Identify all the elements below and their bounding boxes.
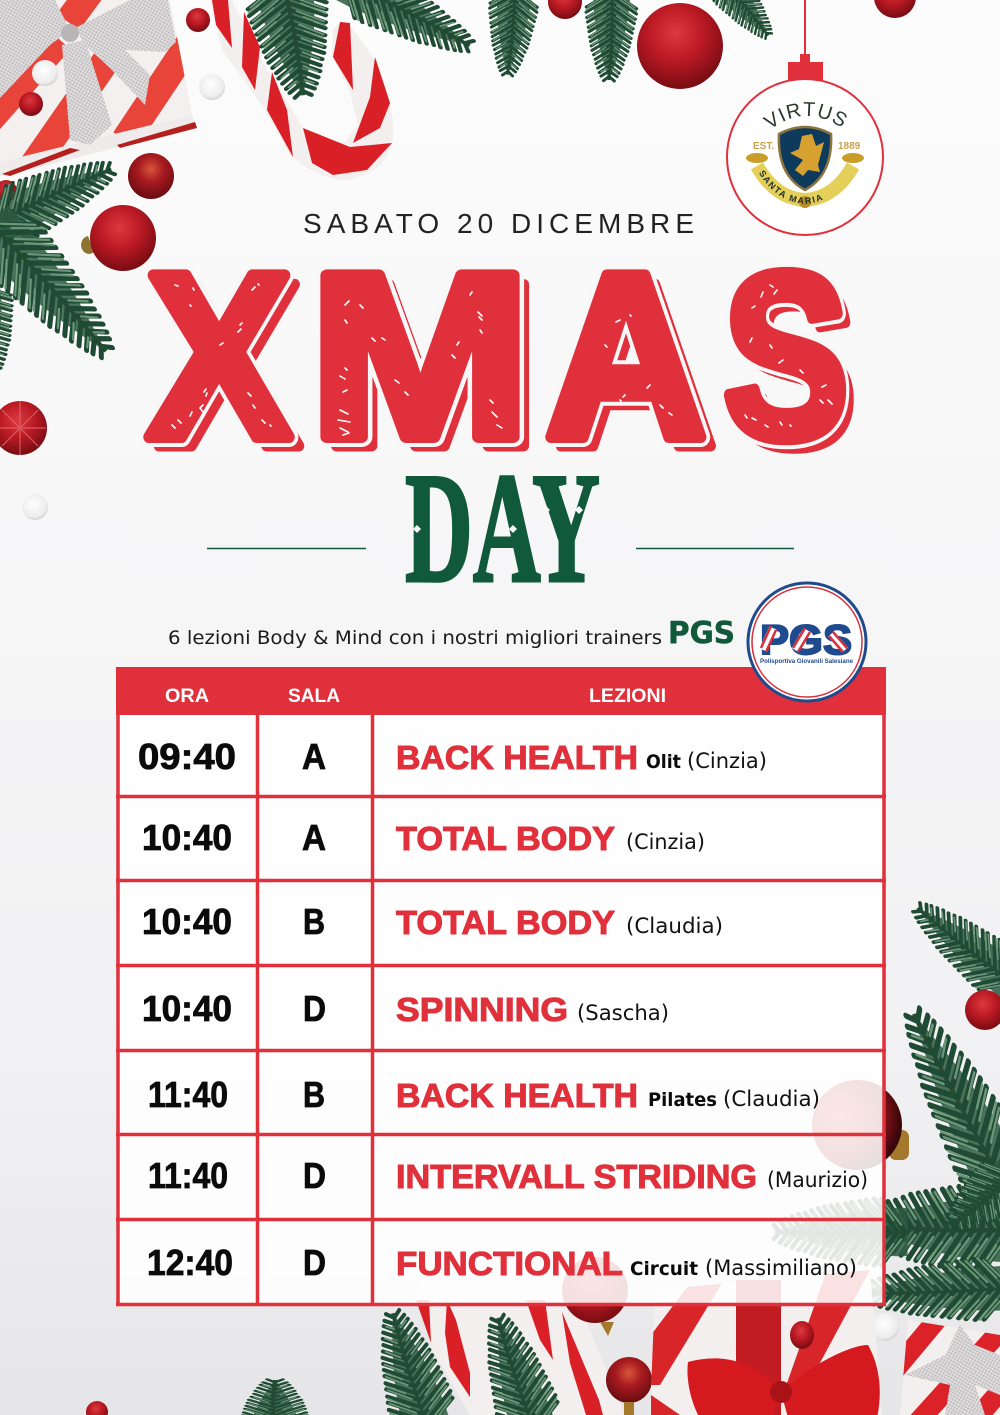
XMAS distress specks bbox=[172, 284, 832, 435]
decoration: bottom candy cane bbox=[416, 1270, 625, 1415]
XMAS main letters bbox=[147, 225, 849, 488]
logo: Virtus ornament: EST. bbox=[753, 141, 774, 152]
row 4: SPINNING bbox=[396, 991, 568, 1028]
decoration: small gift bottom right bbox=[900, 1320, 1000, 1415]
row 3: (Claudia) bbox=[626, 914, 723, 938]
decoration: left fir branches bbox=[0, 142, 133, 380]
row 6: 11:40 bbox=[148, 1155, 228, 1196]
table grid bbox=[116, 667, 886, 1306]
row 3: B bbox=[303, 901, 325, 942]
date heading: SABATO 20 DICEMBRE bbox=[303, 208, 694, 239]
logo: PGS badge: PGS bbox=[760, 616, 852, 663]
row 5: B bbox=[303, 1074, 325, 1115]
decoration: top fir branches bbox=[244, 0, 784, 103]
header labels bbox=[165, 686, 666, 707]
decoration: gift box top left bbox=[0, 0, 197, 176]
XMAS gap layer: M bbox=[309, 225, 531, 488]
row 5: BACK HEALTH bbox=[396, 1077, 638, 1114]
decoration: right baubles bbox=[812, 990, 1000, 1170]
XMAS gap layer: A bbox=[545, 225, 707, 487]
title: XMAS bbox=[147, 225, 857, 497]
XMAS shadow layer: S bbox=[731, 234, 857, 497]
row 6: (Maurizio) bbox=[767, 1168, 868, 1192]
shield bbox=[779, 127, 831, 190]
row 1: 09:40 bbox=[138, 736, 236, 777]
logo: Virtus ornament: 1889 bbox=[838, 141, 861, 152]
logo: Virtus ornament: VIRTUS bbox=[762, 102, 846, 127]
subtitle PGS: PGS bbox=[668, 616, 735, 651]
logo: PGS badge bbox=[748, 583, 866, 701]
decoration: bottom baubles bbox=[86, 1257, 899, 1415]
row 4: 10:40 bbox=[142, 988, 232, 1029]
row 1: Olit bbox=[646, 751, 681, 773]
row 5: 11:40 bbox=[148, 1074, 228, 1115]
XMAS shadow layer: M bbox=[319, 234, 541, 497]
row 3: 10:40 bbox=[142, 901, 232, 942]
row 5: Pilates bbox=[648, 1089, 717, 1111]
XMAS main letters: X bbox=[147, 225, 291, 487]
row 2 bbox=[142, 817, 705, 858]
XMAS shadow layer bbox=[157, 234, 857, 497]
XMAS main letters: S bbox=[723, 225, 849, 488]
XMAS gap layer: X bbox=[147, 225, 291, 487]
XMAS shadow layer: A bbox=[555, 234, 717, 496]
header labels: SALA bbox=[288, 686, 340, 707]
logo: PGS badge: Polisportiva Giovanili Salesiane bbox=[760, 658, 853, 665]
DAY lettering: DAY bbox=[405, 441, 600, 616]
row 6: D bbox=[303, 1155, 326, 1196]
logo: Virtus ornament bbox=[726, 0, 884, 236]
row 7: (Massimiliano) bbox=[705, 1256, 857, 1280]
row 2: 10:40 bbox=[142, 817, 232, 858]
decoration: gift box bottom bbox=[650, 1270, 882, 1415]
row 7: 12:40 bbox=[147, 1242, 233, 1283]
row 1 bbox=[138, 736, 767, 777]
subtitle: 6 lezioni Body & Mind con i nostri migliori trainers bbox=[168, 627, 662, 649]
DAY left line bbox=[207, 548, 366, 550]
row 7: FUNCTIONAL bbox=[396, 1245, 623, 1282]
decoration: right fir branches bbox=[857, 886, 1000, 1324]
lion bbox=[790, 134, 824, 176]
decoration: candy cane top bbox=[210, 0, 393, 180]
row 5: (Claudia) bbox=[723, 1087, 820, 1111]
DAY right line bbox=[636, 548, 794, 550]
row 6: INTERVALL STRIDING bbox=[396, 1158, 757, 1195]
XMAS main letters: A bbox=[545, 225, 707, 487]
row 6 bbox=[148, 1155, 868, 1196]
ribbon bbox=[757, 166, 853, 200]
row 5 bbox=[148, 1074, 820, 1115]
row 2: TOTAL BODY bbox=[396, 820, 615, 857]
row 3: TOTAL BODY bbox=[396, 904, 615, 941]
XMAS gap layer: S bbox=[723, 225, 849, 488]
row 2: A bbox=[302, 817, 326, 858]
row 4: D bbox=[303, 988, 326, 1029]
row 7 bbox=[147, 1242, 857, 1283]
row 4: (Sascha) bbox=[577, 1001, 669, 1025]
decoration: top red baubles bbox=[0, 0, 916, 202]
row 3 bbox=[142, 901, 723, 942]
row 2: (Cinzia) bbox=[626, 830, 705, 854]
title: DAY bbox=[207, 441, 794, 616]
row 7: D bbox=[303, 1242, 326, 1283]
header labels: LEZIONI bbox=[589, 686, 666, 707]
table bbox=[116, 667, 886, 1306]
decoration: bottom fir branches bbox=[239, 1198, 908, 1415]
DAY ornaments bbox=[413, 506, 583, 533]
XMAS gap layer bbox=[147, 225, 849, 488]
table row backgrounds bbox=[118, 714, 884, 1304]
row 1: A bbox=[302, 736, 326, 777]
table header bbox=[116, 667, 886, 715]
decoration: left baubles bbox=[0, 205, 156, 520]
row 4 bbox=[142, 988, 669, 1029]
XMAS shadow layer: X bbox=[157, 234, 301, 496]
header labels: ORA bbox=[165, 686, 209, 707]
logo: Virtus ornament: SANTA MARIA bbox=[760, 170, 823, 204]
row 1: (Cinzia) bbox=[687, 749, 767, 773]
XMAS main letters: M bbox=[309, 225, 531, 488]
row 1: BACK HEALTH bbox=[396, 739, 638, 776]
row 7: Circuit bbox=[630, 1258, 698, 1280]
